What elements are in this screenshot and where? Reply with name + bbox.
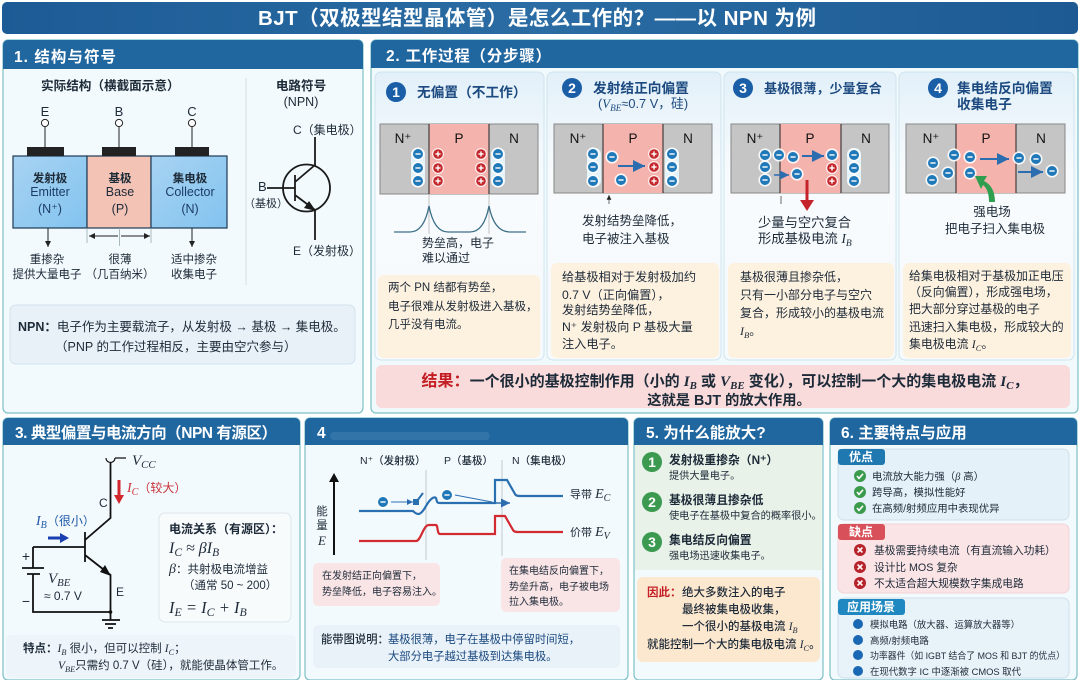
diagram: common emitter circuit: I [35, 514, 47, 531]
callout: result: 结果：一个很小的基极控制作用（小的 I [422, 373, 690, 390]
step 2 card [547, 72, 721, 360]
callout: NPN note: （PNP 的工作过程相反，主要由空穴参与） [55, 339, 296, 354]
diagram: BJT cross section: 适中掺杂 [171, 252, 217, 266]
reason 2: 基极很薄且掺杂低 [669, 493, 764, 507]
chart: energy band diagram: N（集电极） [512, 454, 572, 467]
diagram: NPN symbol: C（集电极） [293, 122, 362, 137]
diagram: BJT cross section: C [187, 104, 197, 119]
step 2 card: 0.7 V（正向偏置）， [562, 287, 670, 302]
callout: current relations: β：共射极电流增益 [168, 562, 268, 577]
callout: band diagram explanation: 基极很薄，电子在基极中停留时间短， [388, 632, 580, 646]
diagram: BJT cross section: (N) [181, 202, 199, 216]
step 3 card: I [739, 324, 750, 340]
step 4 card: 收集电子 [957, 96, 1012, 112]
applications: 高频/射频电路 [870, 635, 929, 646]
step 2 card: 发射结势垒降低， [582, 213, 682, 228]
applications: 功率器件（如 IGBT 结合了 MOS 和 BJT 的优点） [870, 650, 1065, 661]
diagram: BJT cross section: 很薄 [108, 252, 132, 266]
step 3 card: P [805, 131, 815, 146]
diagram: common emitter circuit: C [132, 487, 139, 498]
callout: current relations: 电流关系（有源区）： [169, 521, 283, 536]
step 4 card: （反向偏置），形成强电场， [909, 285, 1058, 299]
diagram: BJT cross section: (P) [112, 202, 128, 216]
step 4 card: 迅速扫入集电极，形成较大的 [909, 320, 1064, 334]
callout: therefore: 最终被集电极收集， [682, 602, 786, 616]
callout: characteristics: V [58, 660, 75, 674]
step 3 card: 形成基极电流 I [758, 231, 846, 246]
step 1 card: 势垒高，电子 [422, 235, 494, 250]
callout: current relations [159, 513, 291, 622]
step 2 card: 发射结正向偏置 [593, 80, 689, 96]
title [2, 2, 1078, 34]
diagram: common emitter circuit: − [22, 593, 30, 609]
step 3 card: 。 [749, 324, 761, 338]
step 4 card: N [1036, 131, 1046, 146]
diagram: BJT cross section [12, 104, 227, 281]
callout: emitter junction note: 势垒降低，电子容易注入。 [322, 585, 442, 598]
diagram: BJT cross section: 重掺杂 [30, 252, 64, 266]
step 1 card: 难以通过 [422, 251, 470, 265]
step 1 card: N⁺ [395, 131, 411, 146]
advantages [838, 449, 1069, 520]
callout: characteristics: B [61, 648, 66, 657]
callout: therefore: 就能控制一个大的集电极电流 I [647, 639, 804, 651]
callout: collector junction note [501, 558, 620, 612]
callout: band diagram explanation [313, 625, 620, 668]
callout: current relations: I [169, 598, 174, 617]
diagram: common emitter circuit: V [132, 453, 141, 469]
applications: 模拟电路（放大器、运算放大器等） [870, 619, 1020, 630]
callout: therefore: 绝大多数注入的电子 [682, 585, 786, 599]
step 2 card: BE [610, 103, 622, 113]
callout: therefore: 一个很小的基极电流 I [682, 621, 793, 633]
reason 1: 提供大量电子。 [669, 469, 740, 482]
step 2 card: ≈0.7 V，硅) [621, 96, 688, 111]
diagram: common emitter circuit: C [99, 496, 108, 510]
chart: energy band diagram: 能 [316, 504, 328, 518]
step 4 card: 集电结反向偏置 [957, 80, 1053, 96]
chart: energy band diagram [316, 454, 612, 560]
panel: working process [371, 40, 1078, 413]
heading: section 6: 6. 主要特点与应用 [841, 423, 967, 442]
step 3 card: B [846, 238, 852, 249]
step 3 card: 3 [739, 80, 747, 96]
step 1 card: 1 [392, 84, 400, 100]
diagram: NPN symbol: E（发射极） [293, 243, 361, 258]
heading: section 2: 2. 工作过程（分步骤） [386, 46, 551, 65]
advantages: 优点 [849, 449, 873, 464]
step 1 card: N [509, 131, 519, 146]
disadvantages: 基极需要持续电流（有直流输入功耗） [874, 544, 1056, 557]
step 4 card [899, 72, 1074, 360]
diagram: NPN symbol: （基极） [244, 196, 288, 210]
step 2 card: 2 [568, 80, 576, 96]
diagram: common emitter circuit: （较大） [138, 480, 186, 495]
step 4 card: 4 [934, 80, 942, 96]
panel: bias and current direction [3, 418, 300, 680]
advantages: 电流放大能力强（β 高） [872, 470, 984, 483]
diagram: BJT cross section: Emitter [30, 185, 70, 199]
step 2 card: 发射结势垒降低， [562, 302, 660, 317]
callout: therefore: 因此： [647, 585, 682, 599]
chart: energy band diagram: 量 [316, 519, 328, 532]
callout: characteristics: I [164, 643, 175, 657]
advantages: 跨导高，模拟性能好 [872, 486, 966, 499]
diagram: BJT cross section: （几百纳米） [86, 268, 154, 281]
diagram: BJT cross section: 集电极 [173, 171, 208, 185]
step 4 card: P [981, 131, 991, 146]
callout: NPN note: NPN：电子作为主要载流子，从发射极 → 基极 → 集电极。 [18, 319, 346, 334]
callout: result: C [1006, 380, 1014, 392]
callout: current relations: C [174, 547, 182, 559]
diagram: common emitter circuit: BE [57, 577, 71, 589]
diagram: common emitter circuit: E [116, 585, 124, 599]
step 2 card: 电子被注入基极 [582, 231, 670, 246]
chart: energy band diagram: 导带 E [570, 487, 604, 502]
callout: current relations: C [207, 605, 216, 619]
diagram: common emitter circuit: + [22, 548, 30, 564]
step 1 card: 两个 PN 结都有势垒， [388, 280, 502, 294]
callout: current relations: E [174, 605, 182, 619]
callout: result: I [999, 374, 1014, 392]
applications [838, 598, 1069, 678]
step 3 card: 基极很薄，少量复合 [764, 80, 882, 96]
callout: NPN note [10, 305, 355, 364]
step 4 card: 。 [981, 337, 993, 351]
step 3 card: 只有一小部分电子与空穴 [740, 287, 872, 302]
diagram: BJT cross section: Base [106, 185, 134, 199]
diagram: common emitter circuit: B [41, 520, 47, 531]
reason 3: 3 [648, 534, 656, 550]
step 2 card: 给基极相对于发射极加约 [562, 269, 696, 284]
callout: characteristics [6, 635, 296, 678]
callout: therefore: C [804, 644, 810, 653]
step 3 card: 少量与空穴复合 [758, 215, 851, 230]
step 2 card: 注入电子。 [562, 336, 623, 351]
callout: therefore: 。 [809, 639, 821, 651]
diagram: NPN symbol [244, 122, 362, 258]
diagram: common emitter circuit [22, 453, 186, 628]
callout: result: 这就是 BJT 的放大作用。 [647, 391, 811, 409]
chart: energy band diagram: P（基极） [444, 454, 493, 467]
step 4 card: N⁺ [923, 131, 939, 146]
diagram: common emitter circuit: ≈ 0.7 V [44, 589, 82, 603]
callout: result [376, 365, 1070, 409]
diagram: common emitter circuit: （很小） [47, 514, 95, 528]
applications: 应用场景 [847, 599, 895, 614]
reason 3: 集电结反向偏置 [669, 533, 752, 547]
step 4 card: 强电场 [973, 205, 1011, 219]
step 2 card: N⁺ [570, 131, 586, 146]
panel: features and applications [830, 418, 1077, 680]
heading: actual structure: 实际结构（横截面示意） [41, 78, 180, 93]
diagram: BJT cross section: (N⁺) [38, 202, 62, 216]
callout: result: BE [729, 380, 745, 392]
diagram: BJT cross section: E [41, 104, 50, 119]
callout: therefore: B [793, 626, 798, 635]
reason 2 [642, 492, 822, 522]
chart: energy band diagram: V [604, 531, 612, 542]
step 1 card: 电子很难从发射极进入基极， [388, 299, 538, 313]
step 3 card [724, 72, 896, 360]
disadvantages: 缺点 [849, 524, 873, 539]
reason 3: 强电场迅速收集电子。 [669, 549, 771, 562]
panel: energy band [305, 418, 628, 680]
heading: section 1: 1. 结构与符号 [14, 47, 116, 66]
advantages: 在高频/射频应用中表现优异 [872, 502, 1000, 515]
callout: current relations: + I [215, 598, 241, 617]
applications: 在现代数字 IC 中逐渐被 CMOS 取代 [870, 666, 1022, 677]
disadvantages: 不太适合超大规模数字集成电路 [874, 577, 1024, 590]
callout: result: 变化），可以控制一个大的集电极电流 [745, 372, 1000, 390]
reason 1: 1 [648, 454, 656, 470]
diagram: common emitter circuit: V [48, 571, 57, 587]
diagram: BJT cross section: Collector [165, 185, 215, 199]
reason 2: 使电子在基极中复合的概率很小。 [669, 509, 822, 522]
step 4 card: 把电子扫入集电极 [945, 221, 1045, 236]
reason 2: 2 [648, 494, 656, 510]
diagram: BJT cross section: 基极 [108, 171, 132, 185]
step 4 card: 集电极电流 I [909, 337, 976, 351]
disadvantages: 设计比 MOS 复杂 [874, 561, 958, 574]
callout: therefore [637, 577, 821, 662]
callout: emitter junction note [313, 563, 442, 606]
callout: band diagram explanation: 能带图说明： [321, 632, 389, 646]
reason 3 [642, 532, 771, 562]
step 2 card: N [683, 131, 693, 146]
heading: circuit symbol: 电路符号 [276, 78, 326, 93]
diagram: BJT cross section: 提供大量电子 [12, 267, 82, 281]
reason 1: 发射极重掺杂（N⁺） [669, 453, 778, 467]
callout: current relations: I [169, 540, 174, 557]
step 1 card: P [454, 131, 464, 146]
callout: current relations: B [239, 605, 247, 619]
diagram: common emitter circuit: CC [141, 459, 156, 471]
diagram: BJT cross section: B [115, 104, 123, 119]
callout: characteristics: 很小，但可以控制 [66, 641, 165, 655]
reason 1 [642, 452, 778, 482]
callout: characteristics: C [169, 648, 175, 657]
step 2 card: N⁺ 发射极向 P 基极大量 [562, 319, 693, 334]
heading: section 5: 5. 为什么能放大? [646, 423, 766, 442]
step 1 card: 几乎没有电流。 [388, 317, 468, 331]
callout: characteristics: 只需约 0.7 V（硅），就能使晶体管工作。 [75, 658, 283, 672]
heading: section 4: 4 [317, 425, 326, 442]
step 1 card: 无偏置（不工作） [417, 84, 527, 100]
chart: energy band diagram: E [317, 533, 326, 548]
callout: collector junction note: 在集电结反向偏置下， [509, 564, 609, 577]
panel: structure and symbol [3, 40, 363, 413]
callout: result: 或 [697, 372, 720, 390]
diagram: NPN symbol: B [258, 179, 267, 194]
step 3 card: 基极很薄且掺杂低， [740, 269, 848, 284]
step 3 card: N [861, 131, 871, 146]
panel: structure and symbol: (NPN) [284, 95, 318, 109]
step 4 card: 把大部分穿过基极的电子 [909, 302, 1040, 316]
title: BJT（双极型结型晶体管）是怎么工作的？——以 NPN 为例 [258, 7, 816, 30]
chart: energy band diagram: C [604, 493, 611, 504]
callout: current relations: = I [182, 598, 208, 617]
callout: characteristics: ； [174, 643, 186, 655]
heading: section 3: 3. 典型偏置与电流方向（NPN 有源区） [15, 423, 277, 442]
step 4 card: C [976, 343, 982, 353]
step 3 card: 复合，形成较小的基极电流 [740, 305, 884, 320]
step 3 card: N⁺ [747, 131, 763, 146]
callout: emitter junction note: 在发射结正向偏置下， [322, 569, 422, 582]
step 4 card: 给集电极相对于基极加正电压 [909, 269, 1064, 283]
panel: why amplify [634, 418, 823, 680]
callout: result: B [689, 380, 697, 392]
chart: energy band diagram: 价带 E [570, 525, 604, 540]
step 2 card: P [628, 131, 638, 146]
step 3 card: B [744, 330, 750, 340]
step 1 card [375, 72, 544, 360]
diagram: common emitter circuit: I [126, 481, 139, 498]
callout: result: V [720, 374, 745, 392]
diagram: BJT cross section: 收集电子 [171, 267, 217, 281]
callout: current relations: （通常 50 ~ 200） [183, 579, 277, 592]
diagram: BJT cross section: 发射极 [33, 171, 68, 185]
callout: collector junction note: 势垒升高，电子被电场 [509, 580, 609, 593]
callout: result: ， [1013, 373, 1028, 390]
step 2 card: (V [598, 96, 610, 111]
disadvantages [838, 524, 1069, 593]
callout: current relations: ≈ βI [182, 540, 213, 557]
callout: current relations: B [212, 547, 219, 559]
chart: energy band diagram: N⁺（发射极） [360, 454, 426, 467]
callout: characteristics: BE [65, 665, 75, 674]
callout: collector junction note: 拉入集电极。 [509, 595, 569, 608]
callout: band diagram explanation: 大部分电子越过基极到达集电极。 [388, 649, 557, 663]
callout: characteristics: 特点：I [23, 643, 61, 655]
